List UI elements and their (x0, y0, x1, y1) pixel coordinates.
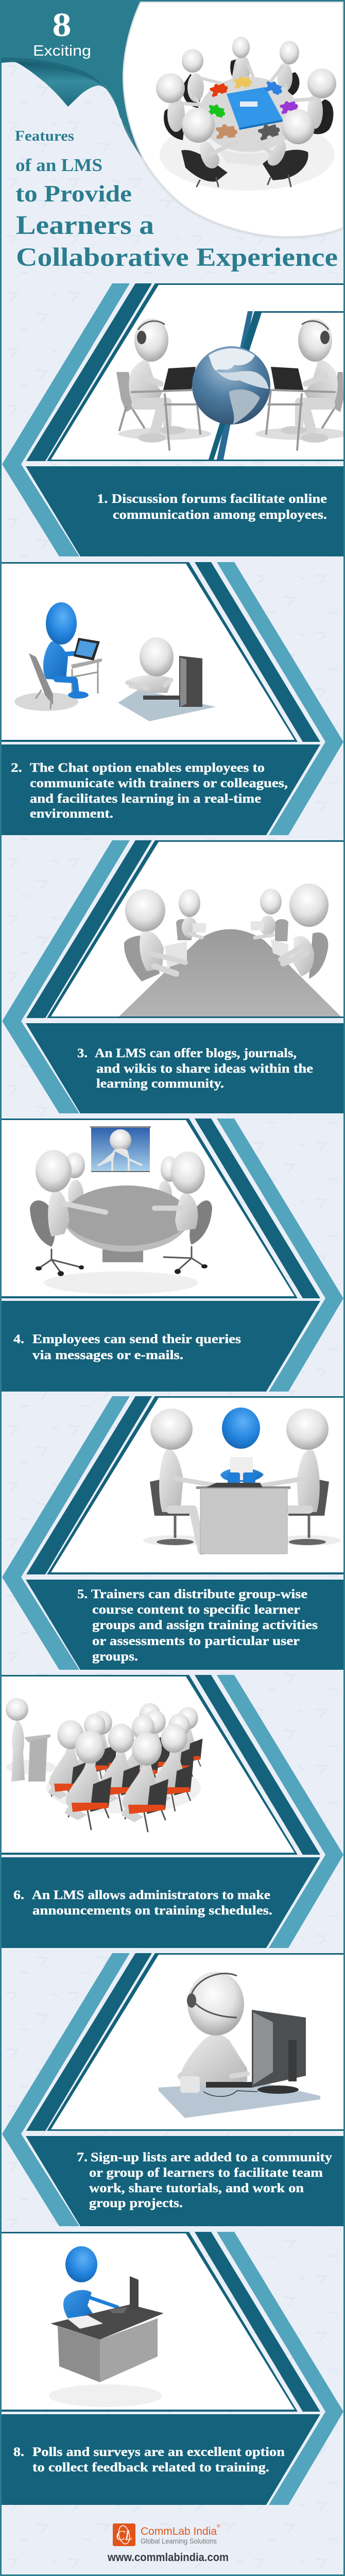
banner (2, 744, 320, 835)
white image area (2, 1676, 295, 1853)
caption 5: or assessments to particular user (92, 1634, 300, 1648)
chevron stripes (2, 283, 343, 556)
white image area (51, 842, 343, 1016)
panel 1: discussion forums (2, 283, 345, 556)
panel: header (2, 2, 343, 272)
panel 5: group-wise content (2, 1396, 343, 1670)
banner (26, 1580, 343, 1670)
chevron stripes (2, 562, 343, 835)
caption 6: An LMS allows administrators to make (32, 1888, 270, 1902)
panel 6: announcements (2, 1675, 343, 1948)
logo mark: CL (116, 2528, 132, 2543)
banner (26, 466, 343, 556)
white image area (51, 1955, 343, 2129)
caption 5 (77, 1587, 318, 1664)
registered mark: ® (217, 2523, 220, 2529)
website: www.commlabindia.com (107, 2551, 229, 2564)
caption 7: work, share tutorials, and work on (89, 2181, 304, 2195)
tagline: Global Learning Solutions (141, 2537, 217, 2545)
caption 1 (97, 492, 327, 522)
word Exciting: Exciting (33, 43, 91, 59)
caption 7: 7. (77, 2150, 88, 2164)
banner (26, 2136, 343, 2226)
white spotlight circle (123, 2, 343, 238)
caption 3 (77, 1046, 313, 1091)
title (15, 128, 338, 272)
chevron stripes (2, 2232, 343, 2505)
caption 8: to collect feedback related to training. (32, 2461, 269, 2475)
chevron stripes (2, 1953, 343, 2226)
white image area (51, 1398, 343, 1572)
blue learner at laptop (14, 602, 102, 711)
panel 8: polls and surveys (2, 2232, 343, 2505)
panel 4: queries via messages (2, 1118, 343, 1392)
title: Collaborative Experience (16, 243, 338, 272)
caption 6 (13, 1888, 272, 1918)
caption 1: communication among employees. (113, 508, 327, 522)
numeral 8: 8 (53, 6, 71, 44)
left operator (116, 318, 211, 450)
caption 2: communicate with trainers or colleagues, (30, 776, 288, 790)
caption 2: and facilitates learning in a real-time (30, 792, 261, 806)
caption 2: environment. (30, 807, 113, 821)
banner (2, 1301, 320, 1392)
title: Features (15, 128, 74, 144)
illustration: people around puzzle table (156, 37, 336, 191)
caption 2: 2. (11, 761, 22, 775)
caption 8: Polls and surveys are an excellent option (32, 2445, 285, 2459)
white image area (2, 2233, 295, 2410)
caption 8 (13, 2445, 285, 2475)
caption 1: 1. Discussion forums facilitate online (97, 492, 327, 506)
panel 7: sign-up lists (2, 1953, 343, 2226)
three people at desk (143, 1408, 341, 1554)
globe (192, 346, 270, 425)
caption 8: 8. (13, 2445, 24, 2459)
title: to Provide (15, 180, 132, 207)
caption 7: or group of learners to facilitate team (89, 2166, 323, 2180)
caption 3: learning community. (96, 1077, 224, 1091)
caption 7: Sign-up lists are added to a community (91, 2150, 333, 2164)
caption 2 (11, 761, 288, 821)
seated audience (46, 1703, 203, 1832)
inner diagonal stripe (209, 311, 343, 460)
banner (2, 1857, 320, 1948)
caption 3: and wikis to share ideas within the (96, 1062, 313, 1076)
caption 7 (77, 2150, 333, 2210)
panel 2: chat option (2, 562, 343, 835)
caption 4: via messages or e-mails. (32, 1348, 183, 1362)
logo mark (113, 2523, 135, 2546)
meeting table with four people (119, 884, 341, 1016)
caption 6: announcements on training schedules. (32, 1904, 272, 1918)
caption 5: groups. (92, 1650, 138, 1664)
footer logo (107, 2523, 229, 2564)
panel 3: blogs journals wikis (2, 840, 343, 1113)
caption 4: 4. (13, 1332, 24, 1346)
white image area (51, 285, 343, 460)
white image area (2, 1120, 295, 1296)
caption 7: group projects. (89, 2196, 183, 2210)
chevron stripes (2, 840, 343, 1113)
live video meeting (30, 1126, 212, 1294)
caption 2: The Chat option enables employees to (30, 761, 265, 775)
caption 5: Trainers can distribute group-wise (91, 1587, 307, 1601)
white learner at monitor (118, 637, 216, 721)
caption 3: 3. (77, 1046, 88, 1060)
right operator (255, 318, 345, 450)
company name: CommLab India (141, 2526, 217, 2537)
title: of an LMS (15, 155, 102, 175)
chevron stripes (2, 1675, 343, 1948)
title: Learners a (16, 211, 154, 240)
caption 6: 6. (13, 1888, 24, 1902)
teal page curl (2, 2, 142, 158)
chevron stripes (2, 1118, 343, 1392)
banner (26, 1023, 343, 1113)
caption 4: Employees can send their queries (32, 1332, 241, 1346)
caption 4 (13, 1332, 241, 1362)
caption 5: course content to specific learner (92, 1603, 300, 1617)
operator with headset and monitor (159, 1972, 320, 2118)
white image area (2, 564, 295, 740)
chevron stripes (2, 1396, 343, 1670)
banner (2, 2414, 320, 2505)
blue person at desk (49, 2246, 164, 2407)
caption 5: 5. (77, 1587, 88, 1601)
caption 3: An LMS can offer blogs, journals, (95, 1046, 297, 1060)
caption 5: groups and assign training activities (92, 1618, 318, 1632)
presenter at podium (6, 1698, 56, 1782)
